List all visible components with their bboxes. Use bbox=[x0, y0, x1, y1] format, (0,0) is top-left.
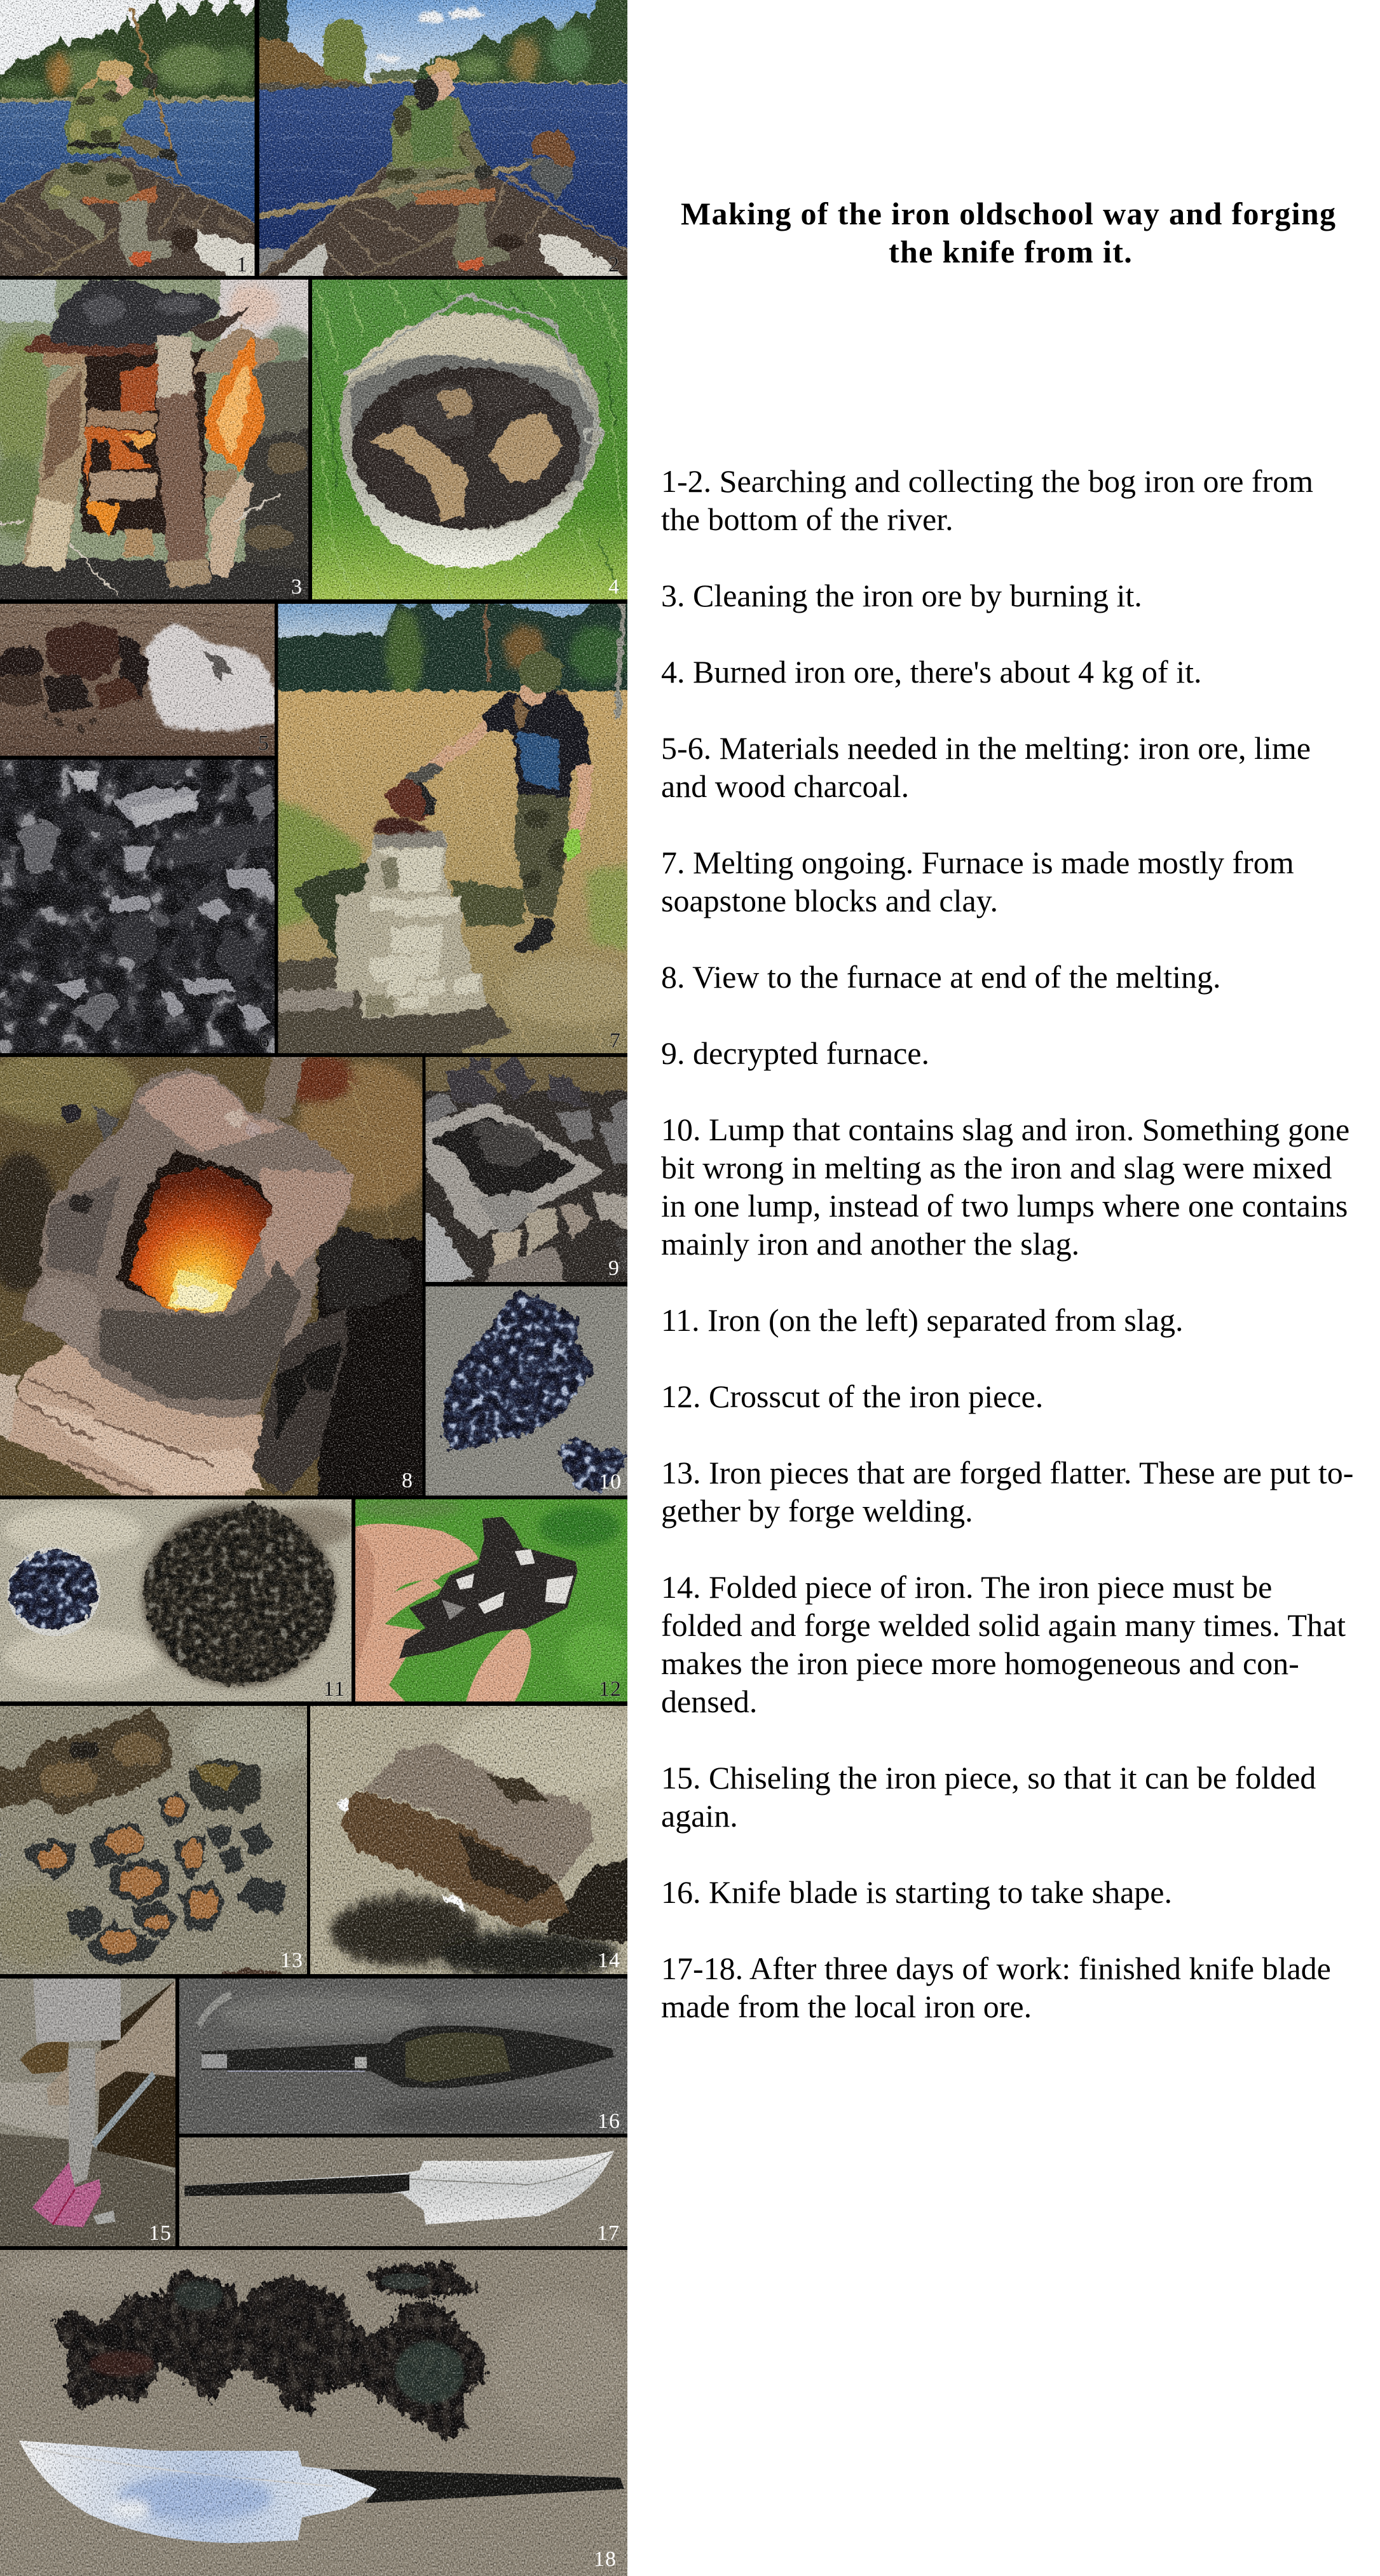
panel: photo 18, iron lumps and finished knife bbox=[0, 2250, 628, 2576]
panel: photo 14, folded piece of iron bbox=[308, 1702, 647, 1978]
caption 10: mainly iron and another the slag. bbox=[661, 1226, 1079, 1262]
caption 12: 12. Crosscut of the iron piece. bbox=[661, 1379, 1043, 1414]
title line 1: Making of the iron oldschool way and forging bbox=[681, 196, 1336, 231]
caption 16: 16. Knife blade is starting to take shape. bbox=[661, 1874, 1172, 1910]
caption 17-18 bbox=[661, 1949, 1331, 2026]
caption 1-2 bbox=[661, 463, 1313, 537]
caption 10 bbox=[661, 1112, 1349, 1262]
caption 10: in one lump, instead of two lumps where one contains bbox=[661, 1188, 1348, 1223]
panel: photo 13, iron pieces forged flatter bbox=[0, 1702, 315, 1978]
panel: photo 7, feeding the soapstone furnace in a field bbox=[274, 601, 636, 1056]
panel: photo 4, bucket of burned iron ore on grass bbox=[309, 276, 631, 603]
caption 14: makes the iron piece more homogeneous and con- bbox=[661, 1646, 1299, 1681]
number 3: 3 bbox=[291, 575, 303, 599]
icon: polished knife blade with dark tang bbox=[19, 2441, 624, 2543]
number 12: 12 bbox=[599, 1677, 622, 1701]
caption 7: 7. Melting ongoing. Furnace is made mostly from bbox=[661, 845, 1294, 880]
number 11: 11 bbox=[324, 1677, 345, 1701]
caption 10: 10. Lump that contains slag and iron. Something gone bbox=[661, 1112, 1349, 1147]
number 6: 6 bbox=[259, 1029, 270, 1053]
number 10: 10 bbox=[599, 1470, 622, 1494]
number 14: 14 bbox=[598, 1949, 620, 1972]
panel: photo 16, knife blade starting to take shape bbox=[179, 1979, 627, 2134]
number 4: 4 bbox=[608, 575, 620, 599]
caption 1-2: the bottom of the river. bbox=[661, 501, 953, 537]
panel: photo 1, woman poling boat on the river bbox=[0, 0, 258, 279]
panel: photo 17, finished knife blade on burlap bbox=[179, 2137, 627, 2246]
number 1: 1 bbox=[236, 253, 248, 276]
title bbox=[681, 196, 1336, 269]
panel: photo 6, pile of wood charcoal bbox=[0, 756, 278, 1056]
number 7: 7 bbox=[610, 1029, 621, 1053]
number 2: 2 bbox=[608, 253, 620, 276]
caption 13: 13. Iron pieces that are forged flatter. These are put to- bbox=[661, 1455, 1353, 1490]
photo collage column bbox=[0, 0, 627, 2576]
caption 8: 8. View to the furnace at end of the melting. bbox=[661, 959, 1221, 995]
caption 10: bit wrong in melting as the iron and slag were mixed bbox=[661, 1150, 1332, 1185]
icon: finished knife blade bbox=[184, 2151, 614, 2225]
icon: rough forged knife blade bbox=[202, 2026, 614, 2088]
panel: photo 2, man holding ore in a net on the boat bbox=[256, 0, 631, 279]
panel: photo 3, burning the ore over a log fire bbox=[0, 276, 311, 603]
panel: photo 11, separated iron in a tin beside slag bbox=[0, 1499, 353, 1701]
caption 5-6: and wood charcoal. bbox=[661, 768, 909, 804]
caption 13: gether by forge welding. bbox=[661, 1493, 973, 1529]
number 8: 8 bbox=[402, 1469, 413, 1492]
number 9: 9 bbox=[608, 1257, 620, 1280]
caption 4: 4. Burned iron ore, there's about 4 kg of it. bbox=[661, 654, 1201, 690]
panel: photo 12, crosscut iron piece held in a hand bbox=[355, 1499, 628, 1701]
caption 5-6: 5-6. Materials needed in the melting: iron ore, lime bbox=[661, 730, 1311, 766]
caption 14: densed. bbox=[661, 1684, 757, 1719]
caption 15: again. bbox=[661, 1798, 738, 1834]
number 5: 5 bbox=[258, 732, 270, 755]
caption 3: 3. Cleaning the iron ore by burning it. bbox=[661, 578, 1142, 613]
caption 17-18: made from the local iron ore. bbox=[661, 1989, 1032, 2024]
caption 9: 9. decrypted furnace. bbox=[661, 1035, 929, 1071]
panel: photo 15, chiseling the iron piece bbox=[0, 1979, 175, 2246]
caption 1-2: 1-2. Searching and collecting the bog iron ore from bbox=[661, 463, 1313, 499]
caption 14: folded and forge welded solid again many times. That bbox=[661, 1607, 1346, 1643]
caption 11: 11. Iron (on the left) separated from slag. bbox=[661, 1302, 1183, 1338]
panel: photo 10, lump of slag and iron bbox=[422, 1283, 631, 1499]
number 15: 15 bbox=[149, 2221, 172, 2245]
title line 2: the knife from it. bbox=[889, 234, 1133, 269]
caption 14: 14. Folded piece of iron. The iron piece must be bbox=[661, 1569, 1272, 1605]
number 13: 13 bbox=[280, 1949, 303, 1972]
caption 7 bbox=[661, 845, 1294, 918]
number 18: 18 bbox=[594, 2547, 617, 2571]
caption 13 bbox=[661, 1454, 1353, 1530]
caption 15 bbox=[661, 1759, 1316, 1835]
panel: photo 9, dismantled furnace blocks bbox=[422, 1054, 631, 1285]
caption 7: soapstone blocks and clay. bbox=[661, 883, 998, 918]
caption 17-18: 17-18. After three days of work: finished knife blade bbox=[661, 1951, 1331, 1986]
panel: photo 5, iron ore and lime on a board bbox=[0, 601, 278, 759]
caption 5-6 bbox=[661, 730, 1311, 804]
panel: photo 8, view into the glowing furnace bbox=[0, 1049, 437, 1499]
number 16: 16 bbox=[598, 2109, 620, 2133]
caption 14 bbox=[661, 1568, 1346, 1721]
caption 15: 15. Chiseling the iron piece, so that it can be folded bbox=[661, 1760, 1316, 1796]
number 17: 17 bbox=[597, 2221, 620, 2245]
